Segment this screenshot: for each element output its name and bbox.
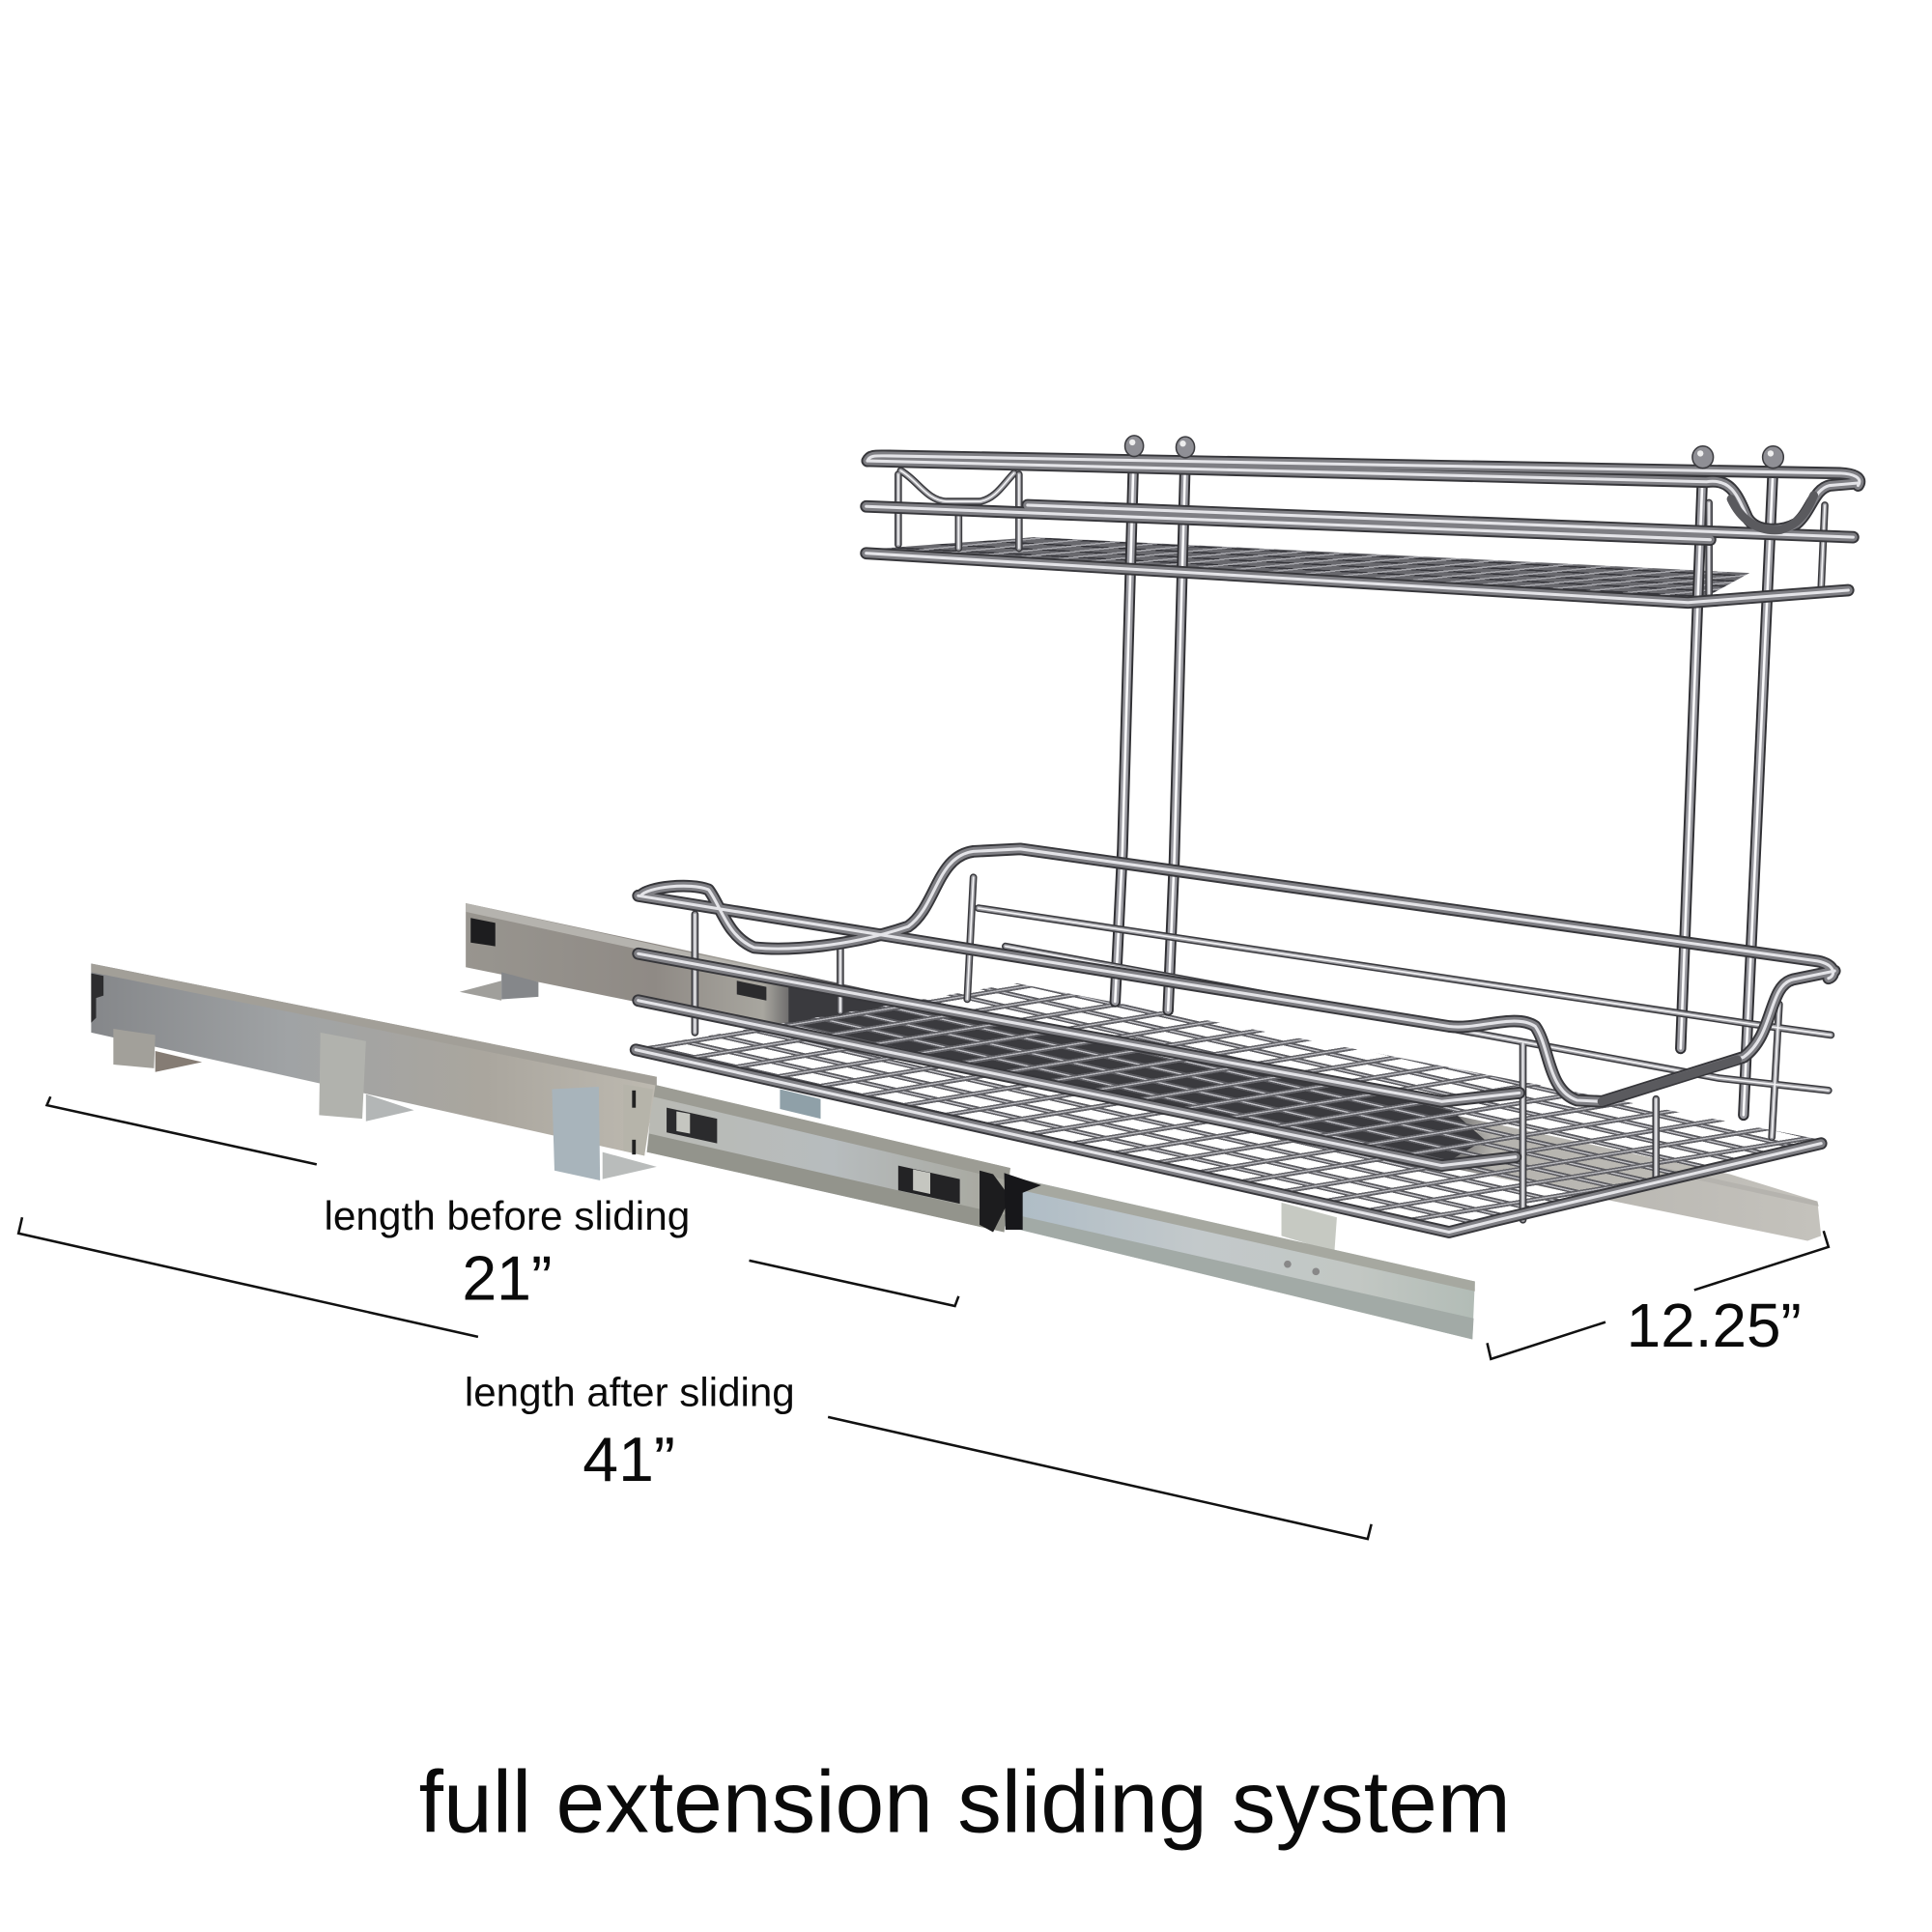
basket floor wire mesh xyxy=(640,983,1821,1233)
chrome wire tubes xyxy=(636,456,1860,1233)
rail mount on extended rail xyxy=(1282,1203,1337,1252)
title: full extension sliding system xyxy=(419,1753,1511,1852)
dimension bracket: before sliding left xyxy=(46,1096,317,1164)
rail mounting brackets xyxy=(113,1029,657,1180)
dimension bracket: after sliding right xyxy=(828,1417,1372,1539)
bracket under basket xyxy=(780,1090,820,1119)
dimension bracket: before sliding right xyxy=(750,1261,958,1306)
label: length before sliding: length before sliding xyxy=(324,1193,690,1238)
dark rail visible through mesh xyxy=(788,983,1485,1166)
middle telescoping rail xyxy=(647,1084,1010,1233)
dimension bracket: width left xyxy=(1488,1322,1605,1359)
value: 21 inches: 21” xyxy=(462,1243,552,1314)
value: 12.25 inches: 12.25” xyxy=(1627,1291,1802,1360)
label: length after sliding: length after sliding xyxy=(465,1369,795,1414)
dimension bracket: after sliding left xyxy=(18,1217,478,1337)
upper shelf wire mesh xyxy=(881,537,1749,600)
black rail latch xyxy=(980,1171,1041,1233)
value: 41 inches: 41” xyxy=(582,1424,675,1494)
rear sliding rail xyxy=(460,903,1821,1240)
chrome knobs xyxy=(1125,436,1783,469)
extended inner rail xyxy=(1005,1177,1475,1339)
dark handle shading xyxy=(1602,496,1814,1101)
front fixed rail xyxy=(91,963,657,1155)
dimension bracket: width right xyxy=(1694,1231,1829,1290)
